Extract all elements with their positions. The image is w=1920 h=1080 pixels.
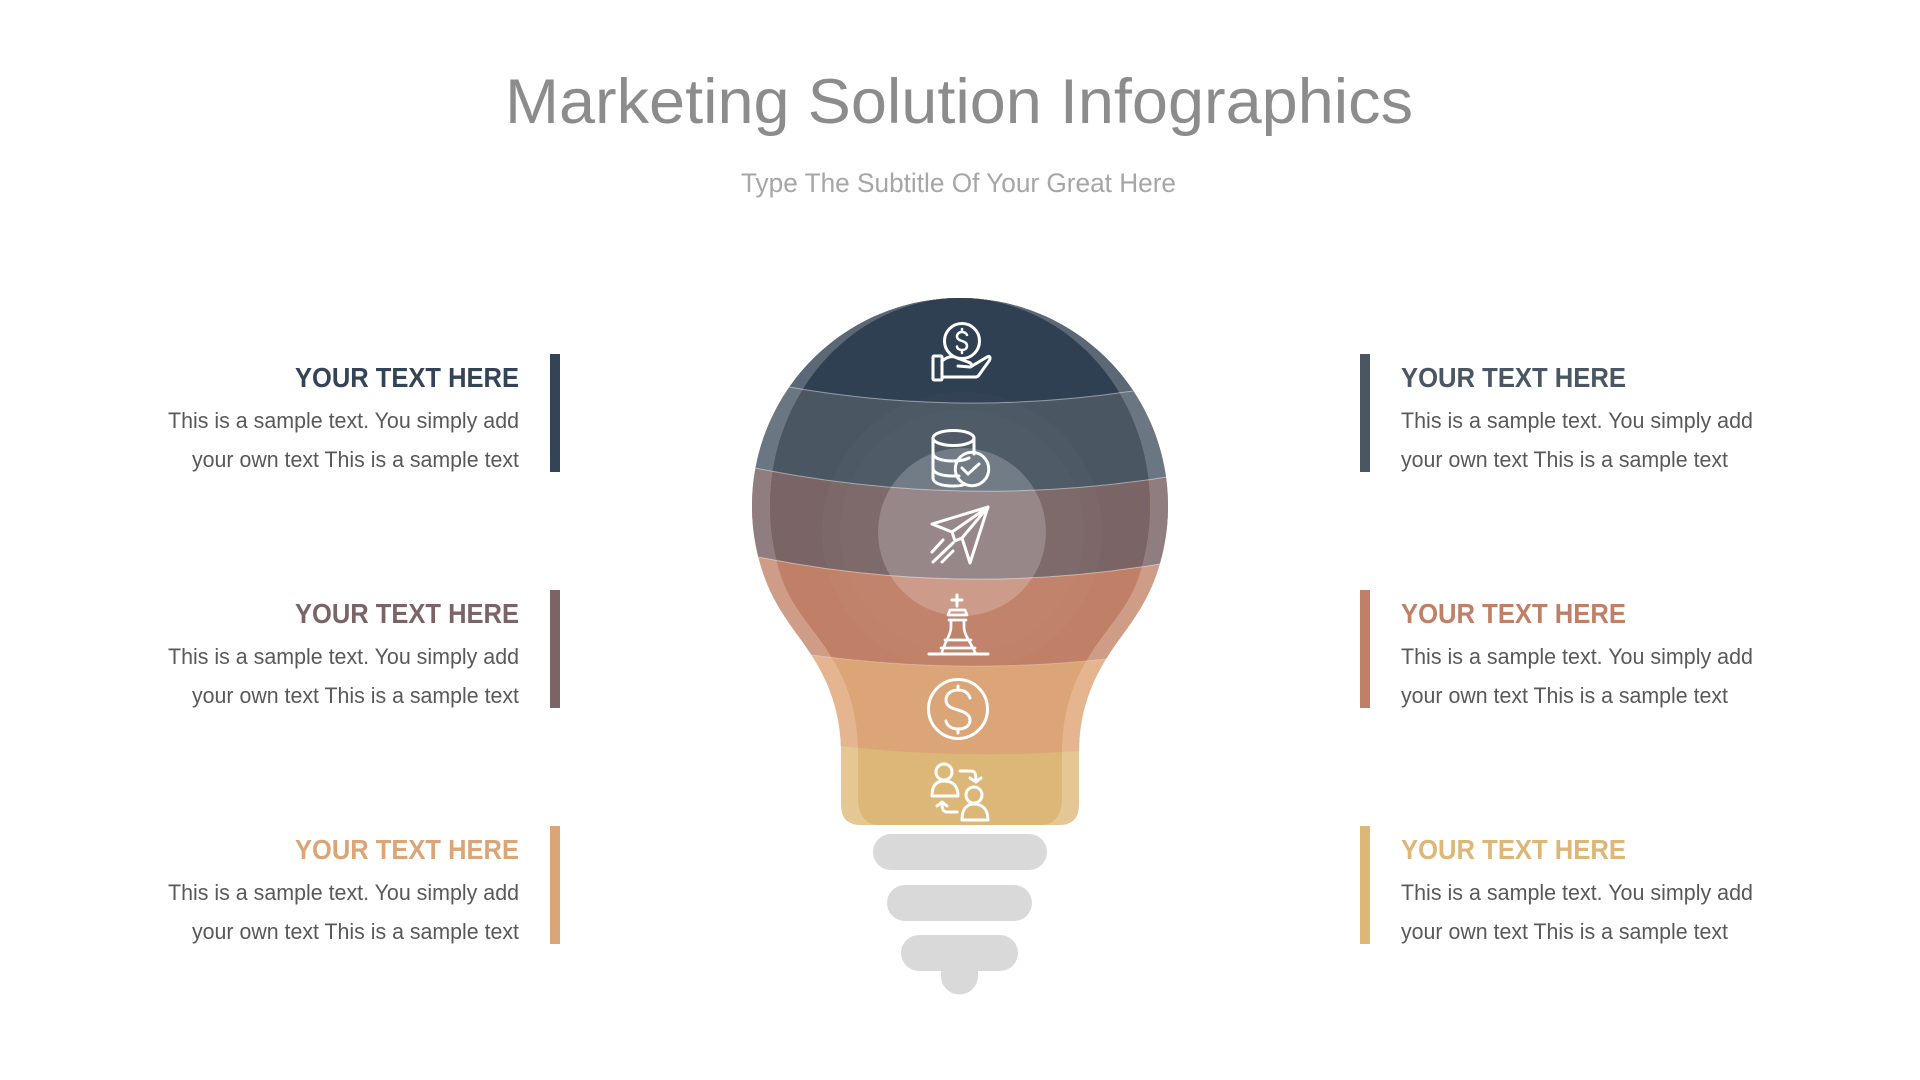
- panel: right text 1: This is a sample text. You simply add: [1401, 408, 1753, 433]
- panel: right text 3: This is a sample text. You simply add: [1401, 880, 1753, 905]
- icon: people exchange: [932, 764, 988, 820]
- heading: YOUR TEXT HERE: [295, 834, 519, 865]
- panel: right text 2: This is a sample text. You simply add: [1401, 644, 1753, 669]
- centre glow circle: [878, 448, 1046, 616]
- panel: right text 1: your own text This is a sample text: [1401, 447, 1728, 472]
- panel: left text 1: [168, 354, 560, 472]
- panel: left text 3: [168, 826, 560, 944]
- panel: left text 3: your own text This is a sample text: [192, 919, 519, 944]
- heading: YOUR TEXT HERE: [1401, 834, 1626, 865]
- panel: left text 2: [168, 590, 560, 708]
- inner darker bands: [770, 298, 1150, 825]
- panel: right text 2: [1360, 590, 1753, 708]
- heading: YOUR TEXT HERE: [1401, 362, 1626, 393]
- icon: database check: [933, 430, 989, 486]
- panel: left text 1: This is a sample text. You simply add: [168, 408, 519, 433]
- panel: right text 3: [1360, 826, 1753, 944]
- heading: YOUR TEXT HERE: [295, 598, 519, 629]
- heading: YOUR TEXT HERE: [295, 362, 519, 393]
- icon: dollar coin: [928, 680, 988, 738]
- panel: right text 2: your own text This is a sample text: [1401, 683, 1728, 708]
- icon: chess king: [929, 595, 988, 654]
- panel: right text 1: [1360, 354, 1753, 472]
- light bulb glass with six coloured bands: [752, 298, 1168, 825]
- subtitle: Type The Subtitle Of Your Great Here: [741, 168, 1176, 198]
- bulb screw base: [873, 834, 1047, 995]
- heading: YOUR TEXT HERE: [1401, 598, 1626, 629]
- icon: paper plane: [932, 507, 988, 563]
- icon: hand holding coin: [933, 324, 990, 380]
- panel: left text 2: This is a sample text. You simply add: [168, 644, 519, 669]
- outer lighter bands: [752, 298, 1168, 825]
- panel: right text 3: your own text This is a sample text: [1401, 919, 1728, 944]
- panel: left text 1: your own text This is a sample text: [192, 447, 519, 472]
- title: Marketing Solution Infographics: [505, 67, 1413, 137]
- panel: left text 2: your own text This is a sample text: [192, 683, 519, 708]
- panel: left text 3: This is a sample text. You simply add: [168, 880, 519, 905]
